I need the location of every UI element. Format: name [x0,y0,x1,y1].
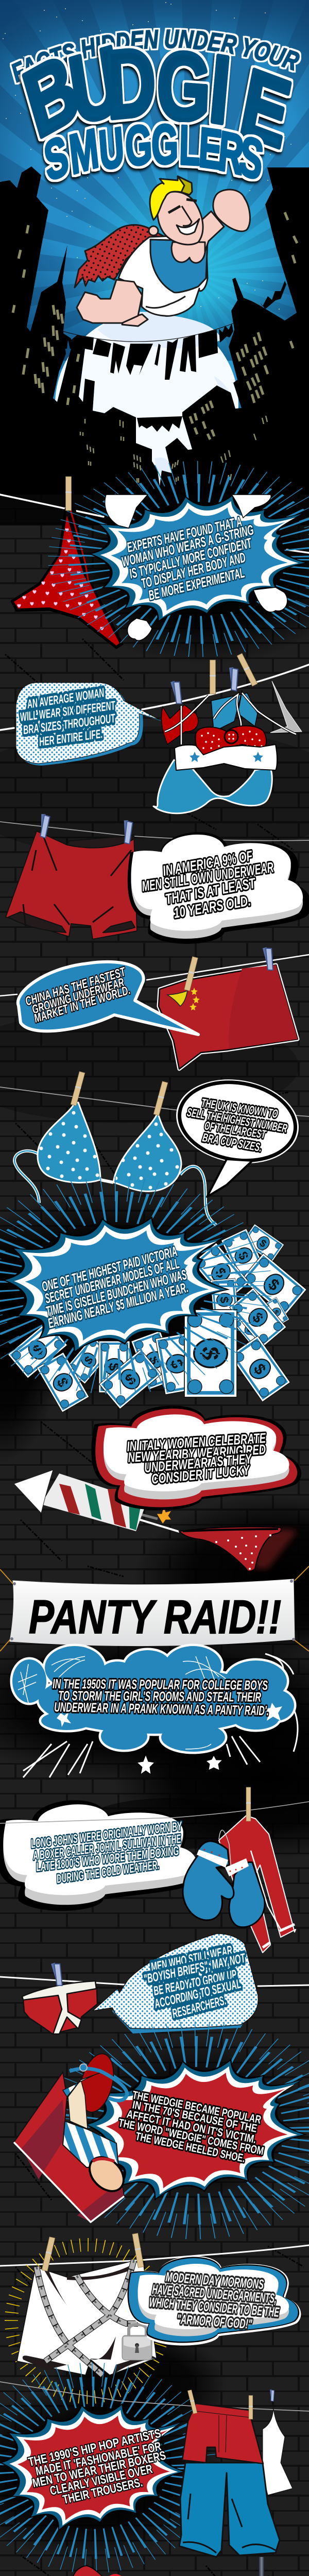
lower hand [171,242,205,263]
burst text [40,1244,190,1331]
buckle [80,2064,87,2071]
title [10,26,301,193]
flying banknotes [8,1224,306,1412]
clothesline 1 [0,495,309,730]
pegs [187,2389,274,2419]
cloud text [141,848,275,921]
cloud text: UNDERWEAR AS THEY [144,1451,253,1476]
cloud text: A BOXER CALLER JOHN L SULLIVAN IN THE [32,1832,182,1863]
panel: bra sizes fact [16,653,302,814]
cape [75,225,175,287]
halftone speech bubble [93,1934,258,2033]
white locked boxers [17,2261,157,2375]
burst text [117,2088,265,2165]
white bra with stars [175,744,277,770]
body and briefs [118,234,208,316]
tiny laundry silhouettes far away [92,281,286,432]
eyes and nose [175,205,192,226]
bubble text: BE READY TO GROW UP [152,1967,238,1998]
ankle strap [70,2069,127,2100]
clothesline 2 [0,822,309,841]
fist [213,190,250,231]
bubble text: AN AVERAGE WOMAN [26,686,106,711]
panel: night sky, moon and city silhouette [0,0,309,505]
briefs [22,1981,97,2034]
upper arm and forearm [178,211,224,258]
neck and face [158,192,203,245]
burst rays [0,1189,254,1382]
clothesline laundry silhouettes [63,323,233,380]
white tank top [263,2400,293,2495]
cloud speech bubble [127,2256,301,2346]
cloud speech bubble [128,832,309,944]
burst text [27,2427,167,2507]
Chinese flag [159,965,298,1069]
cross hatch marks [18,1656,227,1749]
burst text [120,514,255,603]
red polka dot bra [196,726,266,755]
panel: panty raid cloud [12,1646,298,1777]
pompom [106,2574,125,2576]
panel: UK bra sizes fact [14,1070,305,1225]
bubble text [142,1943,247,2021]
red long johns [219,1816,296,1953]
clothesline 6 [0,1977,309,1986]
burst rays [0,2375,206,2561]
blue cups behind [211,690,258,732]
padlock [122,2325,152,2360]
cloth [10,1579,295,1646]
drain pipe [257,2557,266,2576]
peg [51,1962,64,1987]
ropes [0,1566,309,1651]
hair shade [178,176,192,195]
panel: old underwear fact [6,814,309,944]
bubble text [24,964,132,1026]
cloud text: IN AMERICA 9% OF [162,848,254,879]
straps [14,1151,216,1225]
burst text: TIME IS GISELLE BUNDCHEN WHO WAS [44,1267,188,1319]
lower strap [63,2121,118,2167]
hero: flying man in underwear [75,176,250,326]
burst text: THE 1990'S HIP HOP ARTISTS [27,2427,162,2469]
title line 2: Budgie: BUDGIE [14,26,298,168]
panel: experts burst [65,472,309,646]
striped grey bra [270,681,302,733]
cloud text [149,2269,280,2332]
bubble text: WILL WEAR SIX DIFFERENT [19,699,117,724]
panel: Victoria's Secret fact [0,1189,306,1412]
burst rays [65,472,309,646]
pegs [42,2233,144,2271]
red bra [161,705,198,744]
pegs [170,653,258,705]
burst shape [84,2059,307,2200]
building windows [13,212,297,483]
burst text: EARNING NEARLY $5 MILLION A YEAR. [46,1280,190,1331]
clothesline 5 [0,1802,309,1823]
balloon tail [207,1159,252,1197]
cloud text: LONG JOHNS WERE ORIGINALLY WORN BY [30,1819,183,1851]
yellow sparkle lines [11,2245,164,2397]
panel: hip hop fact [0,2375,309,2561]
clothesline 4 [0,1087,309,1116]
burst shape [2,1216,230,1353]
burst text: THE WEDGE HEELED SHOE. [134,2129,247,2165]
belly [150,240,208,293]
sky with sun rays [0,0,309,505]
panel: Mormon undergarments fact [11,2233,301,2397]
ear [149,226,158,235]
black balloon [169,1070,305,1173]
cloud text [126,1430,267,1487]
insole [68,2080,88,2129]
panel: wedgie fact [14,2034,309,2227]
bubble text [19,686,117,749]
title line 3: Smugglers: SMUGGLERS [41,113,266,193]
panel: long johns fact [0,1787,309,1953]
bubble text: CHINA HAS THE FASTEST [24,964,128,1009]
hat [72,2566,127,2576]
cloud speech bubble [0,1800,201,1911]
bubble text: HER ENTIRE LIFE. [38,727,104,749]
strap centers [14,1151,216,1225]
cloud text: THAT IS AT LEAST [164,875,258,907]
cloud text: "ARMOR OF GOD!" [177,2311,253,2332]
white strap highlight [165,693,296,744]
pegs [71,1072,168,1115]
boxing gloves [183,1830,265,1927]
burst text: THE WEDGIE BECAME POPULAR [131,2088,262,2126]
panel: g-string fact [12,477,122,648]
red boxers waist [182,2403,263,2464]
burst shape [89,494,308,622]
bubble text: MARKET IN THE WORLD. [32,983,132,1026]
bubble text: ACCORDING TO SEXUAL [152,1976,243,2011]
title line 1: FACTS HIDDEN UNDER YOUR [10,28,301,84]
g-string [12,509,122,648]
moon [55,324,238,486]
white welt [14,2142,124,2222]
eyelets [12,1581,294,1639]
toes [83,2150,130,2198]
panel: Italy new year fact [14,1405,301,1571]
cloud speech bubble [91,1405,301,1510]
panel: boyish briefs fact [22,1934,258,2034]
wedge shoe [14,2050,130,2222]
white burst lines [23,1654,298,1777]
cloud text: CONSIDER IT LUCKY [151,1462,251,1487]
bubble text: RESEARCHERS. [170,1993,228,2021]
dots [41,1113,177,1188]
cloud fill [12,1646,294,1752]
bubble text: BRA SIZES THROUGHOUT [22,711,117,737]
hair [150,176,192,220]
burst text: SECRET UNDERWEAR MODELS OF ALL [43,1256,181,1307]
burst text: IN THE 70'S BECAUSE OF THE [131,2098,258,2135]
cloud text [30,1819,183,1886]
scotsman character [17,2566,133,2576]
burst text: CLEARLY VISIBLE OVER [48,2462,154,2498]
stars [137,1755,222,1774]
burst text: THEIR TROUSERS. [61,2476,144,2507]
bubble text: GROWING UNDERWEAR [30,975,126,1017]
firework rocket [14,1470,179,1532]
cloud text [53,1676,269,1718]
eyebrows [168,199,197,213]
burst rays [61,2034,309,2227]
cups [38,1103,181,1191]
cloud outline [12,1646,294,1752]
balloon text [186,1096,288,1154]
smile [177,219,199,234]
briefs waistband lines [146,296,185,308]
sole shading [22,2099,124,2222]
burst text: AFFECT IT HAD ON IT'S VICTIM. [126,2107,258,2146]
chains [37,2260,138,2375]
splats [57,1703,282,1727]
burst text: ONE OF THE HIGHEST PAID VICTORIA [40,1244,179,1295]
bubble text: MEN WHO STILL WEAR [149,1943,234,1975]
white straps [165,693,296,744]
blue polka dot bikini [14,1103,216,1225]
toenails [93,2159,114,2161]
speech bubble [18,962,199,1036]
blue bra [153,760,272,814]
lower foot [122,314,148,326]
cloud text: LATE 1800'S WHO WORE THEM BOXING [36,1844,180,1874]
burst text: MADE IT 'FASHIONABLE' FOR [35,2439,162,2479]
flying red thong [179,1527,296,1571]
panel: China fact [18,946,298,1069]
leg [77,280,142,323]
banner: Panty Raid [0,1566,309,1651]
pegs [184,946,274,991]
blue jeans [179,2463,280,2557]
cloud text: 10 YEARS OLD. [173,892,252,921]
panel: Scotsman fact [17,2566,296,2576]
cloud text: DURING THE COLD WEATHER. [56,1858,160,1886]
clothesline 8 [0,2382,309,2411]
clothesline 3 [0,955,309,996]
halftone speech bubble [16,683,162,766]
pegs [38,814,133,844]
peg [246,1787,251,1821]
puffs of smoke [105,495,287,640]
red boxer shorts [6,831,137,939]
clothesline 7 [0,2245,309,2266]
clothes peg [66,477,71,511]
balloon text: OF THE LARGEST [203,1118,267,1141]
balloon text: BRA CUP SIZES. [201,1130,263,1154]
upper strap [63,2073,100,2097]
heel cup [75,2050,119,2116]
burst shape [0,2403,186,2531]
sole [14,2072,124,2222]
burst text: MEN TO WEAR THEIR BOXERS [31,2449,167,2490]
